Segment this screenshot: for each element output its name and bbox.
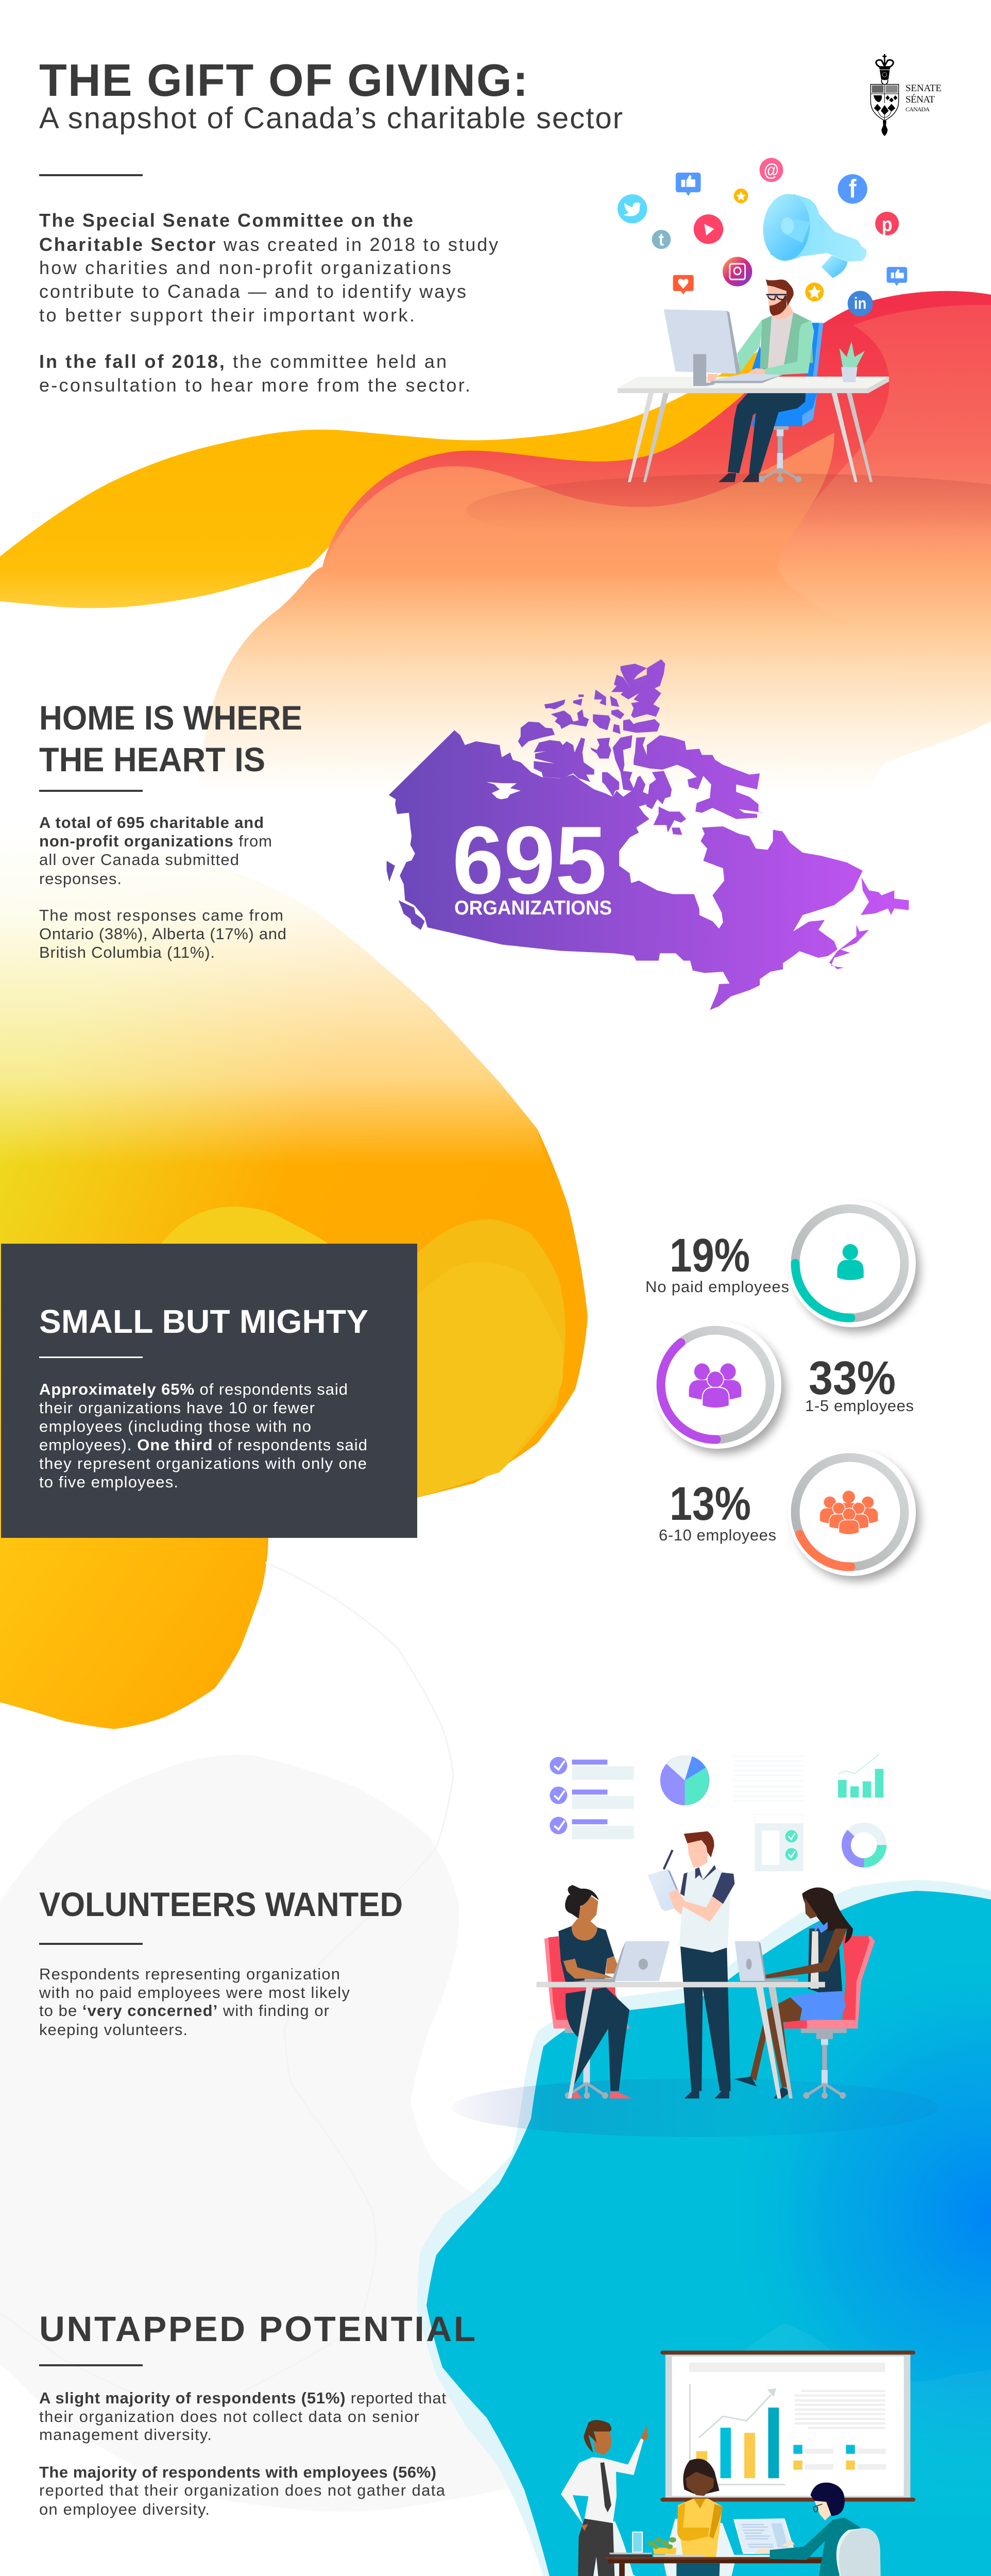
section 4 text: to be ‘very concerned’ with finding or	[39, 2002, 329, 2020]
stat ring: 13% 6-10 employees: 6-10 employees	[659, 1526, 776, 1544]
desk	[618, 377, 889, 482]
icon: twitter	[618, 194, 647, 224]
man	[719, 279, 814, 482]
left chair	[544, 1936, 629, 2099]
intro text: In the fall of 2018, the committee held an	[39, 351, 447, 372]
intro text	[39, 210, 498, 396]
table	[537, 1982, 825, 2098]
section 2 text: British Columbia (11%).	[39, 943, 215, 961]
icon: linkedin: in	[854, 295, 866, 313]
title: A snapshot of Canada’s charitable sector	[39, 101, 623, 135]
logo: Senate of Canada: SENATE	[905, 83, 942, 94]
icon: small star	[734, 189, 748, 203]
panel text: their organizations have 10 or fewer	[39, 1399, 315, 1417]
divider	[39, 174, 143, 176]
right woman	[734, 1888, 853, 2098]
stat: 695 organizations: 695	[452, 806, 607, 914]
icon: instagram	[723, 257, 752, 286]
presentation board	[660, 2351, 915, 2502]
stat ring: 13% 6-10 employees	[659, 1448, 920, 1581]
icon: heart bubble	[673, 275, 694, 294]
left woman	[558, 1885, 633, 2098]
stat ring: 19% no paid employees: 19%	[670, 1229, 750, 1282]
icon: facebook	[838, 174, 867, 204]
yellow wave	[0, 330, 798, 608]
icon: tumblr	[652, 229, 671, 249]
illustration: man at desk with social media icons	[618, 158, 907, 482]
seated man	[754, 2483, 887, 2576]
section 2 text: non-profit organizations from	[39, 832, 272, 850]
divider	[39, 790, 143, 792]
red orange wave	[198, 291, 991, 793]
panel text: employees). One third of respondents said	[39, 1436, 367, 1454]
stat ring: 33% 1-5 employees	[654, 1321, 914, 1454]
right chair	[783, 1936, 875, 2099]
standing man	[561, 2420, 648, 2576]
divider	[39, 2364, 143, 2366]
section 2 text: A total of 695 charitable and	[39, 814, 264, 832]
laptops	[585, 1941, 798, 1981]
donut chart	[842, 1823, 886, 1868]
section 2 text: The most responses came from	[39, 906, 283, 924]
panel text: to five employees.	[39, 1473, 178, 1491]
section 2 text: all over Canada submitted	[39, 851, 239, 869]
panel text	[39, 1380, 367, 1491]
logo: Senate of Canada	[870, 54, 942, 136]
title: THE GIFT OF GIVING:	[39, 55, 528, 106]
icon: linkedin	[848, 291, 873, 316]
icon: pinterest: p	[882, 213, 892, 235]
orange blob	[0, 824, 588, 1729]
intro text: how charities and non-profit organizations	[39, 257, 451, 278]
icon: tumblr: t	[659, 229, 664, 249]
icon: at sign: @	[764, 160, 779, 180]
intro text: to better support their important work.	[39, 304, 415, 326]
floor shadow	[466, 473, 991, 547]
pale cyan wave	[417, 1880, 991, 2576]
heading: SMALL BUT MIGHTY	[39, 1303, 368, 1340]
illustration: presentation meeting	[561, 2351, 915, 2576]
section 5 heading: UNTAPPED POTENTIAL	[39, 2309, 475, 2349]
logo: Senate of Canada: SÉNAT	[905, 94, 935, 105]
section 2 text: Ontario (38%), Alberta (17%) and	[39, 925, 286, 943]
intro text: e-consultation to hear more from the sector.	[39, 375, 470, 396]
icon: at sign	[760, 158, 783, 182]
section 5 text: The majority of respondents with employees (56%)	[39, 2463, 436, 2481]
check card	[755, 1815, 804, 1871]
section 4 heading: VOLUNTEERS WANTED	[39, 1885, 403, 1923]
icon: play	[694, 214, 723, 244]
section 5 text: their organization does not collect data on senior	[39, 2408, 419, 2426]
title	[39, 55, 623, 135]
chairs	[578, 2519, 745, 2576]
text lines	[734, 1756, 804, 1801]
section 2 heading	[39, 699, 302, 778]
intro text: The Special Senate Committee on the	[39, 210, 413, 231]
lighter right overlay	[777, 305, 991, 736]
section 4 text	[39, 1965, 350, 2039]
icon: facebook: f	[849, 174, 857, 203]
illustration: volunteers at table	[537, 1754, 886, 2099]
panel text: Approximately 65% of respondents said	[39, 1380, 348, 1398]
map of Canada	[387, 659, 909, 1010]
section 2 text: responses.	[39, 870, 122, 888]
divider	[39, 1357, 143, 1358]
panel text: employees (including those with no	[39, 1417, 311, 1435]
icon: star	[805, 282, 824, 301]
icon: like bubble	[676, 173, 700, 196]
section 5 text: on employee diversity.	[39, 2500, 210, 2518]
icon: pinterest	[875, 212, 899, 235]
seated woman	[664, 2459, 723, 2576]
intro text: contribute to Canada — and to identify ways	[39, 281, 466, 302]
stat ring: 33% 1-5 employees: 33%	[809, 1352, 896, 1404]
thin outline curve	[0, 1563, 453, 2418]
tablet man	[647, 1831, 734, 2098]
stat ring: 19% no paid employees	[645, 1199, 920, 1332]
panel: small but mighty	[1, 1244, 417, 1538]
stat ring: 19% no paid employees: No paid employees	[645, 1278, 789, 1296]
section 5 text: management diversity.	[39, 2426, 212, 2444]
section 5 text	[39, 2389, 446, 2518]
section 5 text: reported that their organization does not gather data	[39, 2481, 446, 2499]
intro text: Charitable Sector was created in 2018 to study	[39, 234, 498, 255]
floor shadow 2	[452, 2078, 939, 2137]
stat ring: 33% 1-5 employees: 1-5 employees	[805, 1397, 914, 1415]
icon: like bubble 2	[886, 267, 907, 286]
stat: 695 organizations: ORGANIZATIONS	[454, 897, 612, 919]
section 2 text	[39, 814, 286, 961]
computer	[664, 309, 782, 386]
section 2 heading: HOME IS WHERE	[39, 699, 302, 737]
bar chart	[838, 1754, 883, 1798]
section 5 text: A slight majority of respondents (51%) reported that	[39, 2389, 446, 2407]
pie chart	[660, 1755, 709, 1805]
section 4 text: with no paid employees were most likely	[39, 1984, 350, 2002]
checklist	[550, 1757, 634, 1839]
table with objects	[606, 2519, 825, 2576]
icon: megaphone	[759, 191, 866, 278]
section 4 text: keeping volunteers.	[39, 2021, 187, 2039]
chair	[751, 323, 824, 482]
cyan wave	[426, 1891, 991, 2576]
lighter orange wave	[322, 433, 834, 567]
stat ring: 13% 6-10 employees: 13%	[670, 1478, 751, 1530]
logo: Senate of Canada: CANADA	[905, 106, 930, 113]
divider	[39, 1943, 143, 1945]
panel text: they represent organizations with only one	[39, 1454, 367, 1472]
plant	[840, 341, 865, 382]
grey blob	[0, 1755, 567, 2512]
section 2 heading: THE HEART IS	[39, 740, 265, 778]
section 4 text: Respondents representing organization	[39, 1965, 340, 1983]
